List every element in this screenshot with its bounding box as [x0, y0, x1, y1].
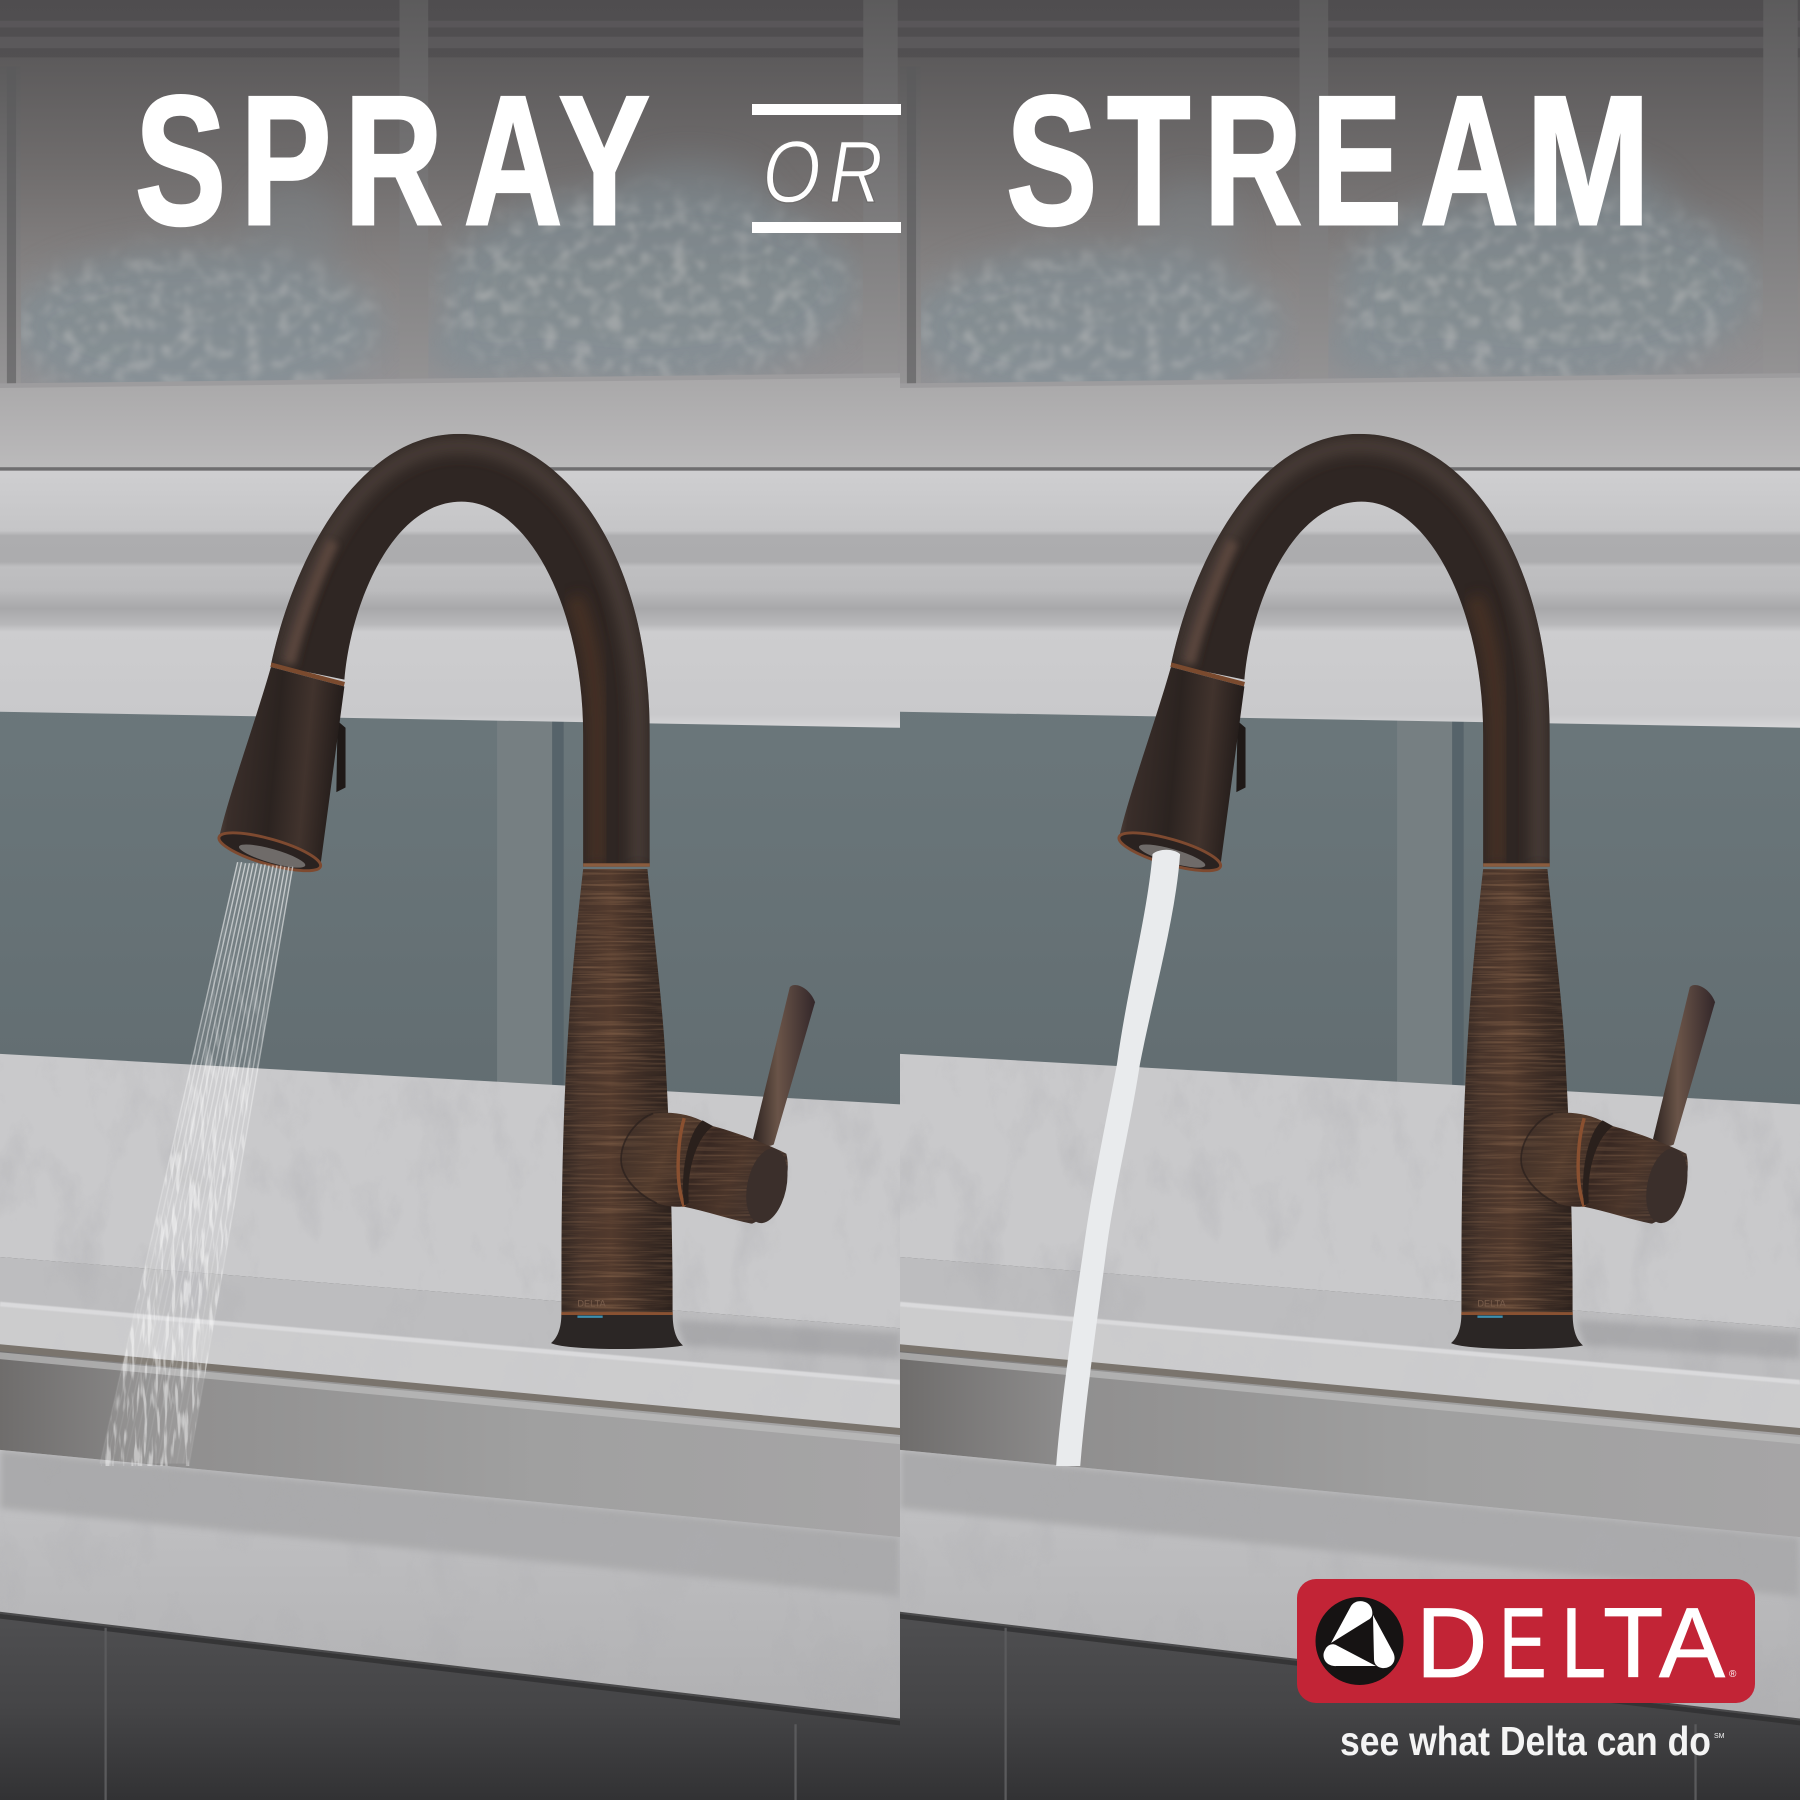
- title: STREAM: STREA: [1006, 58, 1519, 264]
- window with trees: [0, 0, 900, 408]
- moulding: [0, 468, 900, 728]
- faucet: [216, 425, 815, 1349]
- cabinet: [0, 1612, 900, 1800]
- gooseneck spout: [264, 425, 654, 872]
- wordmark DELTA: [1416, 1587, 1725, 1699]
- marble counter top: [0, 1251, 900, 1435]
- tagline: see what Delta can do: [1340, 1718, 1711, 1764]
- spray head: [219, 667, 344, 867]
- wordmark DELTA: T: [1603, 1587, 1663, 1698]
- faucet base: DELTA: [577, 1298, 607, 1308]
- wordmark DELTA: A: [1659, 1587, 1725, 1698]
- handle hub and knob: [618, 1108, 796, 1228]
- wordmark DELTA: L: [1561, 1588, 1606, 1699]
- title: STREAM: M: [1526, 57, 1651, 263]
- panel: stream faucet scene: [900, 0, 1800, 1800]
- logo: Delta badge: [1297, 1579, 1755, 1703]
- tagline: SM: [1714, 1733, 1725, 1740]
- panel: spray faucet scene: [0, 0, 900, 1800]
- logo: Delta badge: ®: [1729, 1669, 1737, 1680]
- title: SPRAY: SPRAY: [135, 58, 650, 264]
- stream water: [1056, 850, 1180, 1466]
- teal wall panel: [0, 700, 900, 1108]
- wordmark DELTA: E: [1499, 1589, 1547, 1699]
- icon: Delta triangle mark: [1316, 1597, 1404, 1685]
- OR divider: [752, 104, 901, 233]
- handle lever: [753, 985, 815, 1146]
- faucet base: [551, 1298, 683, 1349]
- marble backsplash: [0, 1045, 900, 1332]
- spray face: [216, 825, 324, 878]
- sink wall and rim: [0, 1344, 900, 1544]
- spout collar ring: [271, 665, 344, 684]
- base ring: [583, 863, 650, 867]
- front marble counter: [0, 1446, 900, 1728]
- wordmark DELTA: D: [1416, 1587, 1488, 1698]
- OR divider: OR: [762, 123, 883, 221]
- spray head trigger: [336, 721, 346, 792]
- kitchen scene background and faucet: [900, 0, 1800, 1800]
- window sill: [0, 374, 900, 473]
- kitchen scene background and faucet: [0, 0, 900, 1800]
- faucet body: [557, 867, 677, 1317]
- spray water: [100, 862, 294, 1466]
